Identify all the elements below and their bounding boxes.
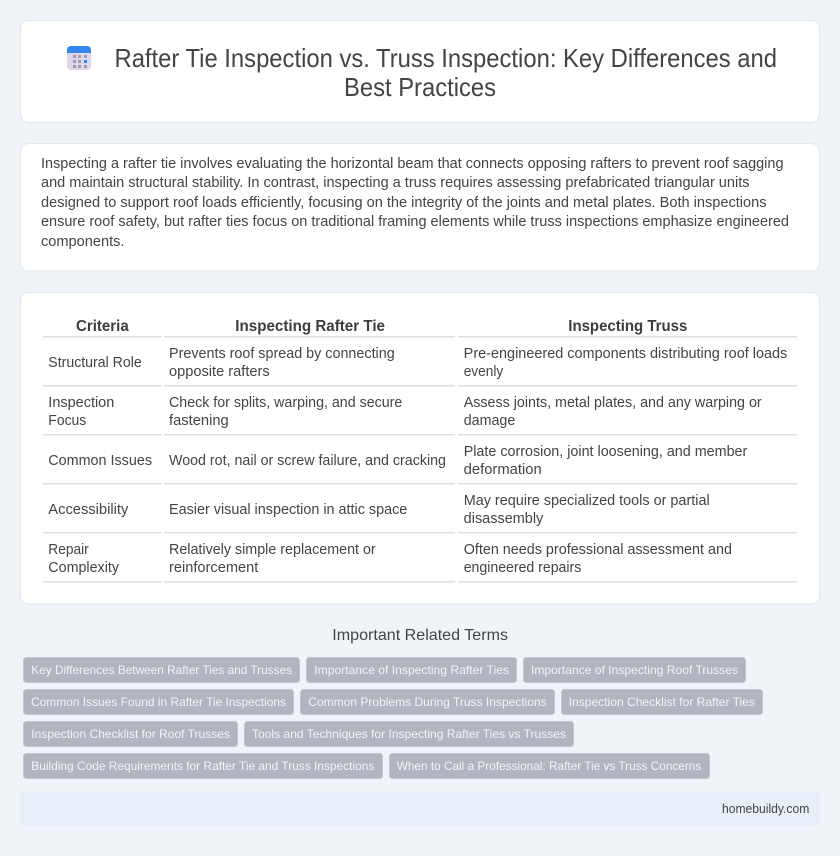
text block: introduction paragraph: and maintain structural stability. In contrast, inspecting a truss requires assessing prefabricated triangular units	[41, 175, 749, 191]
footer: homebuildy.com	[722, 801, 809, 816]
tag	[562, 690, 762, 714]
text block: introduction paragraph: designed to support roof loads efficiently, focusing on the integrity of the joints and metal plates. Both inspections	[41, 195, 766, 211]
table row: common issues: Wood rot, nail or screw failure, and cracking	[169, 453, 446, 469]
table row: common issues: Common Issues	[48, 453, 152, 469]
table row: inspection focus: fastening	[169, 413, 229, 429]
table row: common issues	[43, 444, 797, 484]
table row: common issues: Plate corrosion, joint loosening, and member	[464, 444, 747, 460]
table row: accessibility: May require specialized tools or partial	[464, 493, 710, 509]
tag: Inspection Checklist for Roof Trusses	[31, 727, 230, 741]
text block: introduction paragraph	[41, 156, 789, 250]
table row: accessibility: Easier visual inspection in attic space	[169, 502, 407, 518]
table row: structural role: evenly	[464, 364, 504, 380]
tag	[24, 754, 382, 778]
table row: accessibility: disassembly	[464, 511, 544, 527]
panel: related term tags	[24, 658, 762, 778]
table row: structural role: Structural Role	[48, 355, 142, 371]
panel: title header	[20, 20, 820, 122]
panel: introduction	[20, 144, 820, 271]
table row: structural role	[43, 346, 797, 386]
table row: inspection focus	[43, 395, 797, 436]
text block: introduction paragraph: Inspecting a rafter tie involves evaluating the horizontal beam that connects opposing rafters to prevent roof sagging	[41, 156, 784, 172]
heading: important related terms: Important Related Terms	[332, 627, 508, 644]
table row: inspection focus: damage	[464, 413, 515, 429]
tag: When to Call a Professional: Rafter Tie vs Truss Concerns	[397, 759, 701, 773]
table row: structural role: Prevents roof spread by connecting	[169, 346, 395, 362]
tag	[524, 658, 746, 682]
table row: inspection focus: Focus	[48, 413, 86, 429]
table row: accessibility	[43, 493, 797, 534]
table row: structural role: opposite rafters	[169, 364, 270, 380]
tag: Common Problems During Truss Inspections	[308, 695, 547, 709]
table header row: Criteria	[76, 318, 129, 335]
table row: common issues: deformation	[464, 462, 542, 478]
tag	[390, 754, 710, 778]
text block: introduction paragraph: ensure roof safety, but rafter ties focus on traditional framing elements while truss inspections emphasize engineered	[41, 214, 789, 230]
table header row: Inspecting Rafter Tie	[235, 318, 385, 335]
table row: inspection focus: Check for splits, warping, and secure	[169, 395, 402, 411]
table row: repair complexity: Repair	[48, 542, 89, 558]
table header row	[43, 318, 797, 338]
tag: Inspection Checklist for Rafter Ties	[569, 695, 755, 709]
tag: Building Code Requirements for Rafter Tie and Truss Inspections	[31, 759, 374, 773]
table row: repair complexity: engineered repairs	[464, 560, 581, 576]
table row: repair complexity	[43, 542, 797, 582]
tag: Key Differences Between Rafter Ties and Trusses	[31, 663, 292, 677]
tag: Importance of Inspecting Rafter Ties	[314, 663, 509, 677]
title	[114, 45, 777, 102]
table row: inspection focus: Assess joints, metal plates, and any warping or	[464, 395, 762, 411]
table row: repair complexity: reinforcement	[169, 560, 258, 576]
tag	[24, 658, 300, 682]
table row: inspection focus: Inspection	[48, 395, 114, 411]
tag: Importance of Inspecting Roof Trusses	[531, 663, 738, 677]
table header row: Inspecting Truss	[568, 318, 687, 335]
title: Rafter Tie Inspection vs. Truss Inspection: Key Differences and	[114, 45, 777, 73]
footer	[20, 792, 820, 826]
table row: accessibility: Accessibility	[48, 502, 129, 518]
title: Best Practices	[344, 74, 496, 102]
icon: calendar	[67, 46, 91, 70]
tag	[24, 722, 238, 746]
table row: repair complexity: Relatively simple replacement or	[169, 542, 376, 558]
tag	[306, 658, 516, 682]
tag: Tools and Techniques for Inspecting Rafter Ties vs Trusses	[252, 727, 566, 741]
tag: Common Issues Found in Rafter Tie Inspections	[31, 695, 286, 709]
tag	[300, 690, 554, 714]
text block: introduction paragraph: components.	[41, 234, 124, 250]
table row: structural role: Pre-engineered components distributing roof loads	[464, 346, 787, 362]
tag	[244, 722, 574, 746]
panel: comparison table	[20, 292, 820, 604]
tag	[24, 690, 294, 714]
table row: repair complexity: Complexity	[48, 560, 120, 576]
table row: repair complexity: Often needs professional assessment and	[464, 542, 732, 558]
